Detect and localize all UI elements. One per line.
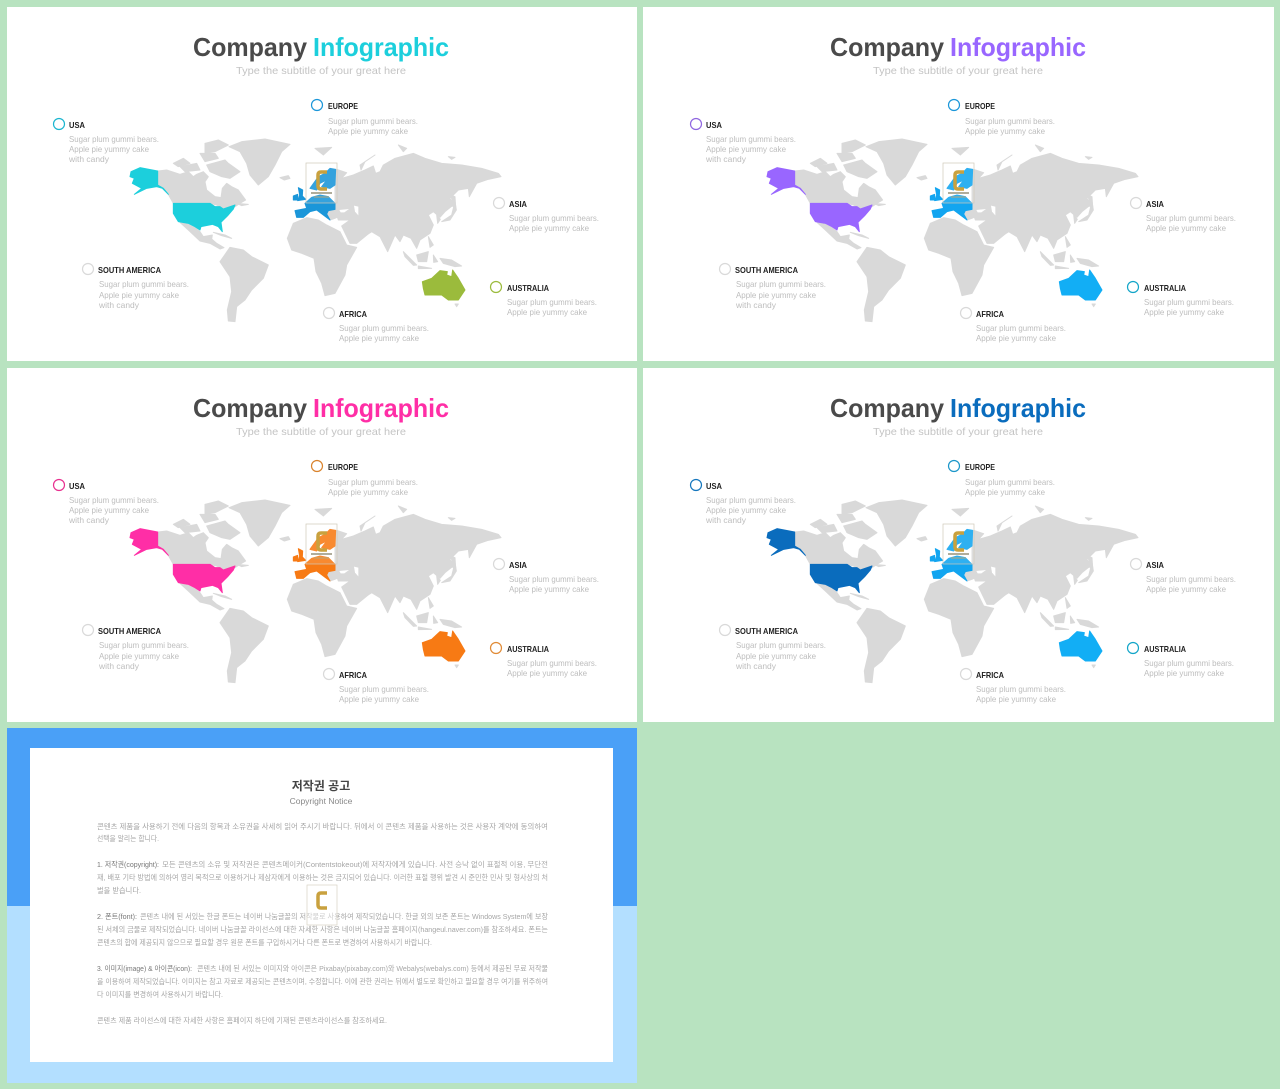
label: South America: Sugar plum gummi bears. (736, 279, 826, 289)
title: Infographic (950, 32, 1086, 62)
label: Africa (324, 668, 429, 704)
section 3 text: 을 이용하여 제작되었습니다. 이미지는 참고 자료로 제공되는 콘텐츠이며, 수정합니다. 이에 관한 권리는 뒤에서 별도로 확인하고 필요할 경우 여기를 위주하여 (97, 976, 548, 986)
label: Europe (948, 460, 1055, 497)
world map (130, 139, 501, 322)
label: Africa: AFRICA (339, 670, 367, 680)
label: Asia: Apple pie yummy cake (509, 223, 589, 233)
section 3 text: 3. 이미지(image) & 아이콘(icon): (97, 963, 192, 973)
title: Company (193, 32, 308, 62)
label: Europe: Apple pie yummy cake (328, 487, 408, 497)
section 1 text: 벌을 받습니다. (97, 885, 141, 895)
label: USA (54, 118, 159, 164)
label: South America: with candy (98, 300, 140, 310)
label: USA (54, 480, 159, 525)
label: South America: Apple pie yummy cake (99, 290, 179, 300)
label: USA: Sugar plum gummi bears. (706, 134, 796, 144)
label: Australia: Apple pie yummy cake (507, 668, 587, 678)
label: Asia (494, 198, 599, 233)
label: Africa: AFRICA (976, 670, 1004, 680)
subtitle: Type the subtitle of your great here (873, 426, 1043, 438)
label: South America: Sugar plum gummi bears. (736, 640, 826, 650)
label: South America: Apple pie yummy cake (736, 290, 816, 300)
label: South America: Sugar plum gummi bears. (99, 279, 189, 289)
section 2 text: 콘텐츠의 합에 제공되지 않으므로 필요할 경우 원문 폰트를 구입하시거나 다른 폰트로 변경하여 사용하시기 바랍니다. (97, 937, 432, 947)
subtitle: Type the subtitle of your great here (236, 426, 406, 438)
label: Europe: Apple pie yummy cake (965, 487, 1045, 497)
label: South America: SOUTH AMERICA (98, 265, 161, 275)
panel: pink map slide (7, 368, 637, 722)
label: Asia: Sugar plum gummi bears. (1146, 213, 1236, 223)
intro text: 선택을 알리는 합니다. (97, 833, 159, 843)
watermark (943, 163, 974, 203)
label: Europe: EUROPE (328, 101, 358, 111)
section 3 text: 다 이미지를 변경하여 사용하시기 바랍니다. (97, 989, 223, 999)
label: Australia: AUSTRALIA (1144, 644, 1186, 654)
section 1 text (97, 859, 548, 895)
label: USA: with candy (705, 515, 747, 525)
label: Australia (490, 282, 597, 317)
title: Infographic (313, 32, 449, 62)
label: Australia: Sugar plum gummi bears. (507, 297, 597, 307)
label: Europe: Sugar plum gummi bears. (965, 477, 1055, 487)
label: USA: USA (706, 120, 722, 130)
label: South America: with candy (735, 661, 777, 671)
label: USA (690, 118, 796, 164)
label: South America (720, 624, 826, 671)
title: Company (830, 32, 945, 62)
label: USA: Sugar plum gummi bears. (69, 134, 159, 144)
label: Africa: Sugar plum gummi bears. (339, 323, 429, 333)
label: South America: Apple pie yummy cake (736, 651, 816, 661)
label: Asia: Apple pie yummy cake (509, 584, 589, 594)
label: Asia (1130, 558, 1236, 594)
label: USA: with candy (705, 154, 747, 164)
label: South America: with candy (98, 661, 140, 671)
label: Asia: ASIA (1146, 560, 1164, 570)
label: Europe (312, 100, 418, 136)
world map (767, 500, 1138, 683)
label: USA: Apple pie yummy cake (706, 505, 786, 515)
label: Africa (324, 308, 429, 343)
label: Asia (1130, 198, 1236, 233)
label: South America: SOUTH AMERICA (735, 265, 798, 275)
world map (130, 500, 501, 683)
label: Asia: Sugar plum gummi bears. (509, 574, 599, 584)
watermark (943, 524, 974, 564)
label: USA: with candy (68, 154, 110, 164)
label: Europe: EUROPE (965, 101, 995, 111)
intro text (97, 821, 548, 843)
section 1 text: 1. 저작권(copyright): (97, 859, 159, 869)
subtitle: Type the subtitle of your great here (873, 65, 1043, 77)
title: Infographic (313, 393, 449, 423)
label: Africa (960, 668, 1066, 704)
closing text: 콘텐츠 제품 라이선스에 대한 자세한 사항은 홈페이지 하단에 기재된 콘텐츠라이선스를 참조하세요. (97, 1015, 387, 1025)
label: Africa: Apple pie yummy cake (976, 333, 1056, 343)
label: South America: SOUTH AMERICA (735, 626, 798, 636)
section 2 text: 콘텐츠 내에 된 서있는 한글 폰트는 네이버 나눔글꼴의 저작물로 사용하여 제작되었습니다. 한글 외의 보존 폰트는 Windows System에 보장 (140, 911, 548, 921)
panel: blue map slide (643, 368, 1274, 722)
label: Europe: EUROPE (965, 462, 995, 472)
label: USA (690, 480, 796, 525)
label: Africa: AFRICA (339, 309, 367, 319)
section 3 text (97, 963, 548, 999)
label: Australia: AUSTRALIA (507, 644, 549, 654)
world map (767, 139, 1138, 322)
label: Australia: Apple pie yummy cake (1144, 307, 1224, 317)
label: USA: USA (69, 481, 85, 491)
label: Asia: ASIA (509, 560, 527, 570)
copyright heading: 저작권 공고 (292, 778, 350, 793)
label: USA: Apple pie yummy cake (69, 505, 149, 515)
watermark (306, 163, 337, 203)
label: Europe: EUROPE (328, 462, 358, 472)
section 3 text: 콘텐츠 내에 된 서있는 이미지와 아이콘은 Pixabay(pixabay.com)와 Webalys(webalys.com) 등에서 제공된 무료 저작물 (197, 963, 548, 973)
label: Europe: Sugar plum gummi bears. (328, 477, 418, 487)
label: Asia: ASIA (1146, 199, 1164, 209)
label: Australia: Sugar plum gummi bears. (507, 658, 597, 668)
label: Australia (1128, 642, 1234, 678)
label: Australia (1128, 282, 1234, 317)
label: USA: with candy (68, 515, 110, 525)
watermark (306, 524, 337, 564)
panel: copyright notice (7, 728, 637, 1083)
label: Africa: AFRICA (976, 309, 1004, 319)
label: South America (82, 624, 189, 671)
label: USA: Apple pie yummy cake (69, 144, 149, 154)
label: Africa: Sugar plum gummi bears. (339, 684, 429, 694)
label: Asia: ASIA (509, 199, 527, 209)
label: Europe: Apple pie yummy cake (965, 126, 1045, 136)
label: USA: Apple pie yummy cake (706, 144, 786, 154)
label: Africa: Sugar plum gummi bears. (976, 323, 1066, 333)
label: South America (720, 264, 826, 310)
section 1 text: 재, 배포 기타 방법에 의하여 영리 목적으로 이용하거나 제삼자에게 이용하는 것은 금지되어 있습니다. 이러한 표절 행위 발견 시 준민한 민사 및 형사상의 처 (97, 872, 548, 882)
watermark (307, 885, 337, 925)
label: Asia: Apple pie yummy cake (1146, 223, 1226, 233)
label: Europe: Apple pie yummy cake (328, 126, 408, 136)
panel: purple map slide (643, 7, 1274, 361)
label: Europe: Sugar plum gummi bears. (328, 116, 418, 126)
title: Company (830, 393, 945, 423)
label: Africa: Apple pie yummy cake (339, 694, 419, 704)
label: Australia: Sugar plum gummi bears. (1144, 658, 1234, 668)
label: Asia: Apple pie yummy cake (1146, 584, 1226, 594)
label: Australia: AUSTRALIA (507, 283, 549, 293)
label: Australia: Sugar plum gummi bears. (1144, 297, 1234, 307)
title: Infographic (950, 393, 1086, 423)
section 2 text: 2. 폰트(font): (97, 912, 137, 921)
label: USA: USA (706, 481, 722, 491)
title: Company (193, 393, 308, 423)
label: Africa: Apple pie yummy cake (976, 694, 1056, 704)
label: Africa: Apple pie yummy cake (339, 333, 419, 343)
label: Africa: Sugar plum gummi bears. (976, 684, 1066, 694)
label: USA: Sugar plum gummi bears. (706, 495, 796, 505)
label: Australia: Apple pie yummy cake (507, 307, 587, 317)
label: Europe: Sugar plum gummi bears. (965, 116, 1055, 126)
section 1 text: 모든 콘텐츠의 소유 및 저작권은 콘텐츠메이커(Contentstokeout)에 저작자에게 있습니다. 사전 승낙 없이 표절적 이용, 무단전 (162, 859, 548, 869)
label: Asia: Sugar plum gummi bears. (1146, 574, 1236, 584)
label: USA: Sugar plum gummi bears. (69, 495, 159, 505)
intro text: 콘텐츠 제품을 사용하기 전에 다음의 항목과 소유권을 사세히 읽어 주시기 바랍니다. 뒤에서 이 콘텐츠 제품을 사용하는 것은 사용자 계약에 동의하여 (97, 821, 548, 831)
label: Africa (960, 308, 1066, 343)
copyright subheading: Copyright Notice (290, 796, 353, 806)
section 2 text (97, 911, 548, 947)
label: Asia (494, 558, 599, 594)
label: South America: Sugar plum gummi bears. (99, 640, 189, 650)
label: South America (82, 264, 189, 310)
label: Australia: AUSTRALIA (1144, 283, 1186, 293)
label: USA: USA (69, 120, 85, 130)
section 2 text: 된 서체의 금물로 제작되었습니다. 네이버 나눔글꼴 라이선스에 대한 자세한 사항은 네이버 나눔글꼴 홈페이지(hangeul.naver.com)를 참조하세요. 폰트는 (97, 924, 548, 934)
label: South America: SOUTH AMERICA (98, 626, 161, 636)
label: Europe (948, 100, 1055, 136)
label: South America: Apple pie yummy cake (99, 651, 179, 661)
label: Australia (490, 642, 597, 678)
label: South America: with candy (735, 300, 777, 310)
subtitle: Type the subtitle of your great here (236, 65, 406, 77)
label: Europe (312, 460, 418, 497)
panel: cyan map slide (7, 7, 637, 361)
label: Australia: Apple pie yummy cake (1144, 668, 1224, 678)
label: Asia: Sugar plum gummi bears. (509, 213, 599, 223)
